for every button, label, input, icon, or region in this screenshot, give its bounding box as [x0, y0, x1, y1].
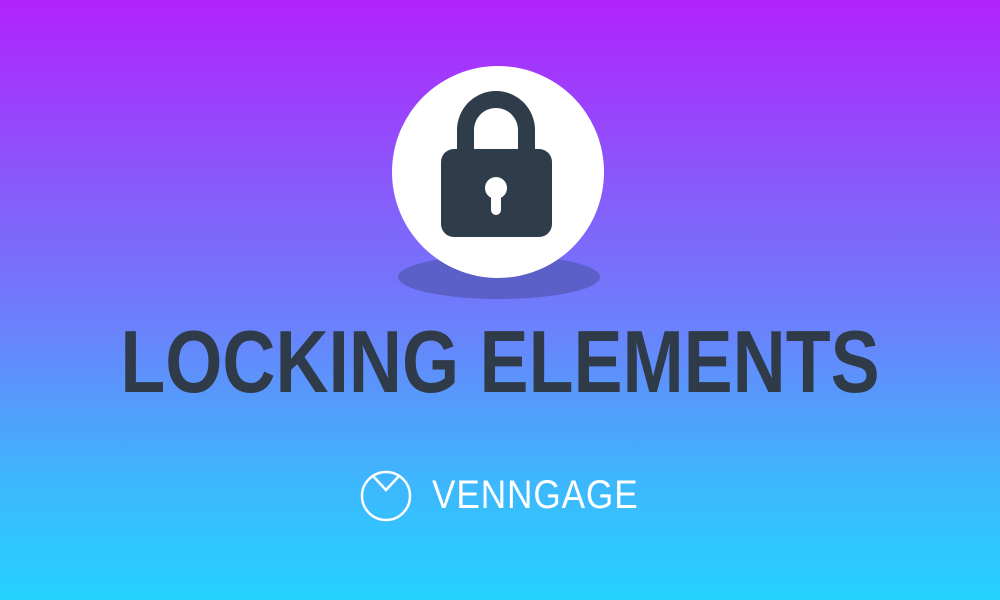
white circle	[392, 66, 604, 278]
lock	[441, 91, 552, 237]
icon: lock badge	[392, 66, 604, 299]
title: LOCKING ELEMENTS	[120, 312, 880, 411]
shadow	[398, 255, 600, 299]
logo text: VENNGAGE	[432, 473, 639, 517]
keyhole	[485, 177, 507, 215]
logo icon	[360, 470, 412, 522]
